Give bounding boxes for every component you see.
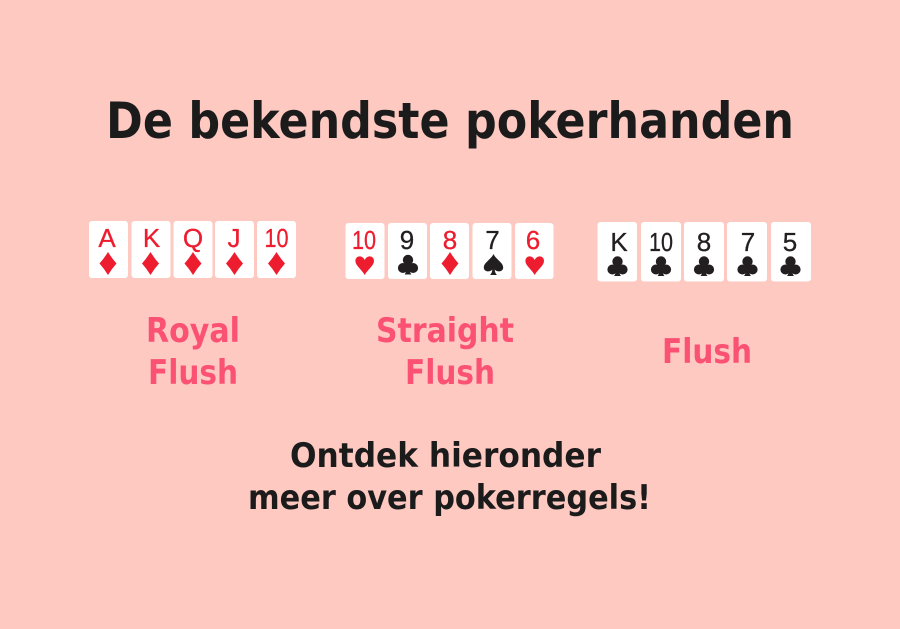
closing call to action: meer over pokerregels! — [248, 478, 651, 517]
card: king of clubs: K — [610, 227, 628, 257]
card: ace of diamonds — [89, 221, 128, 278]
closing call to action: Ontdek hieronder — [290, 436, 601, 475]
card: eight of diamonds: 8 — [443, 225, 457, 255]
closing call to action — [248, 436, 651, 517]
card: ten of clubs: 10 — [649, 227, 673, 257]
card: king of diamonds — [132, 221, 170, 278]
card: queen of diamonds — [174, 221, 212, 278]
card: ten of diamonds: 10 — [264, 223, 288, 253]
hand: flush cards — [598, 222, 811, 282]
label: straight flush — [376, 311, 514, 392]
label: royal flush — [146, 311, 240, 392]
card: jack of diamonds — [215, 221, 254, 278]
card: six of hearts: 6 — [526, 225, 540, 255]
hand: straight flush cards — [346, 223, 554, 279]
label: royal flush: Flush — [148, 353, 238, 392]
card: queen of diamonds: Q — [183, 223, 203, 253]
card: ace of diamonds: A — [98, 223, 116, 253]
card: seven of spades: 7 — [485, 225, 500, 255]
card: ten of clubs — [641, 222, 681, 282]
card: eight of clubs: 8 — [697, 227, 711, 257]
card: nine of clubs — [388, 223, 427, 279]
card: eight of clubs — [684, 222, 724, 282]
title: De bekendste pokerhanden — [106, 92, 794, 150]
label: royal flush: Royal — [146, 311, 240, 350]
card: seven of spades — [472, 223, 512, 279]
hand: royal flush cards — [89, 221, 296, 278]
card: ten of diamonds — [257, 221, 296, 278]
card: eight of diamonds — [430, 223, 469, 279]
label: straight flush: Straight — [376, 311, 514, 350]
card: nine of clubs: 9 — [400, 225, 414, 255]
label: straight flush: Flush — [405, 353, 495, 392]
card: ten of hearts: 10 — [352, 225, 376, 255]
card: seven of clubs: 7 — [741, 227, 755, 257]
card: king of clubs — [598, 222, 637, 282]
card: jack of diamonds: J — [228, 223, 240, 253]
card: king of diamonds: K — [143, 223, 161, 253]
card: six of hearts — [515, 223, 554, 279]
card: seven of clubs — [727, 222, 767, 282]
card: five of clubs — [771, 222, 811, 282]
card: ten of hearts — [346, 223, 384, 279]
card: five of clubs: 5 — [783, 227, 797, 257]
label: flush: Flush — [662, 332, 752, 371]
